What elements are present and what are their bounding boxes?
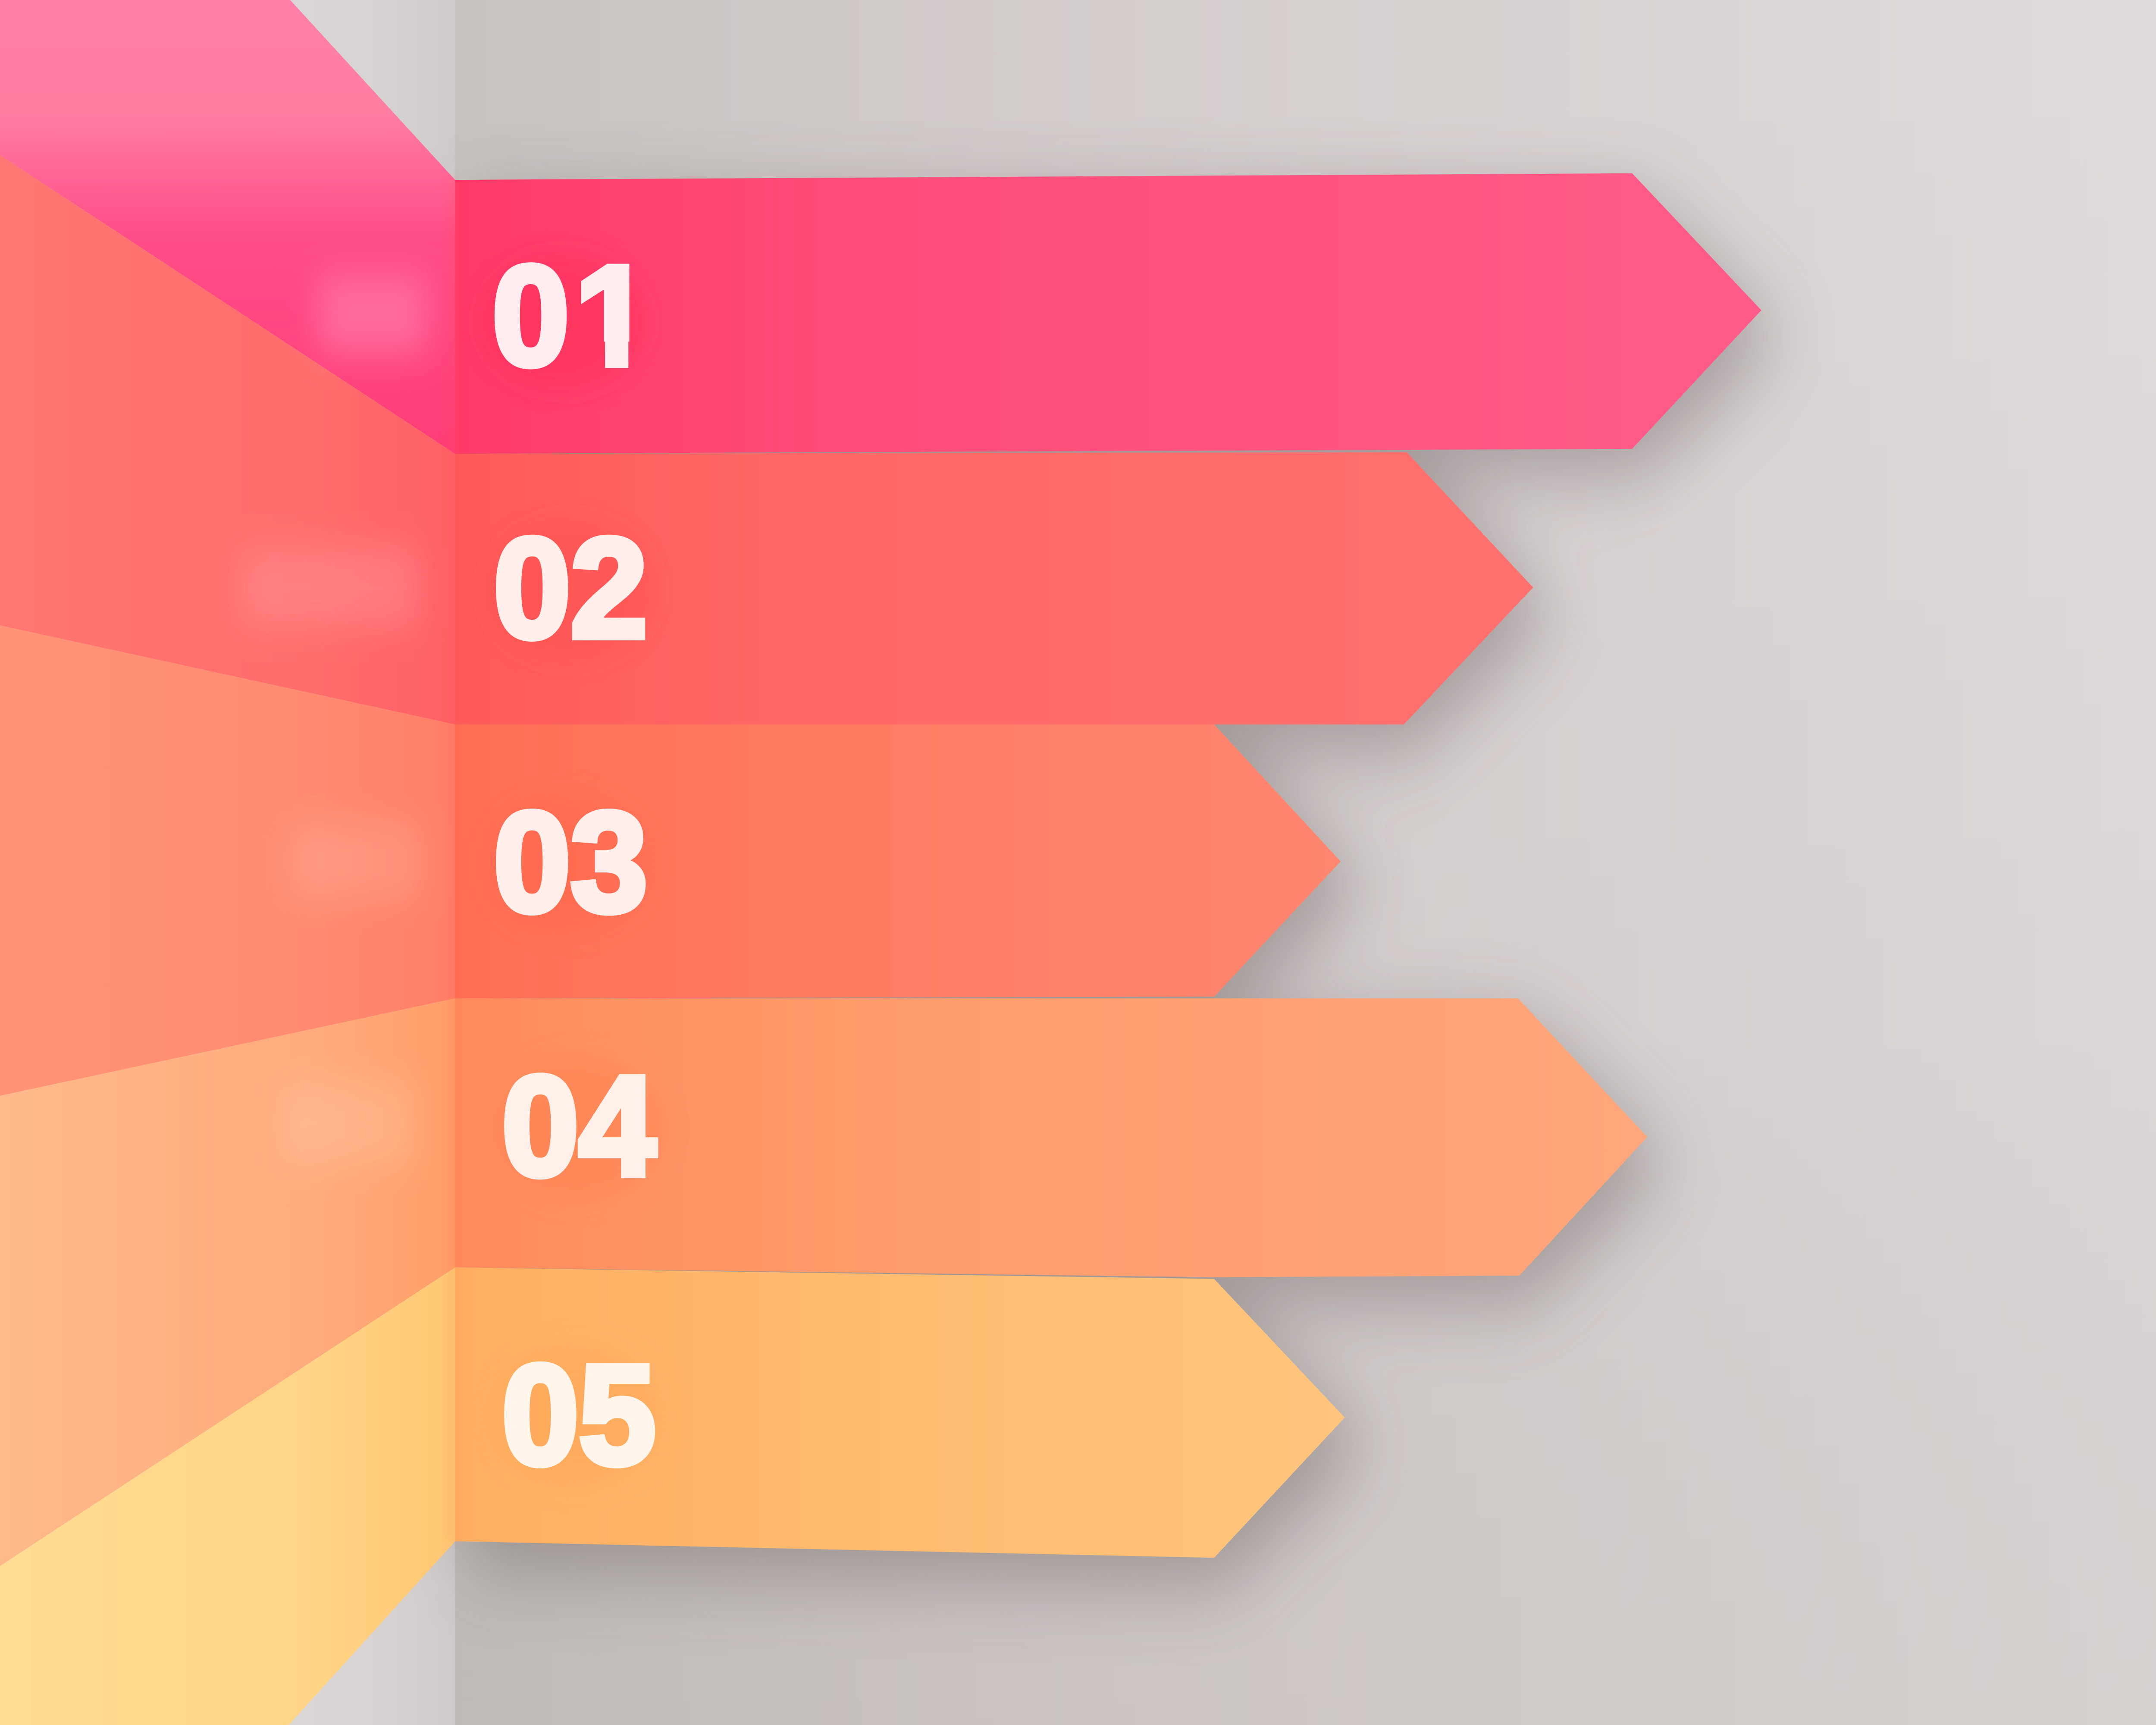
left fold of arrow 03	[0, 625, 455, 1096]
left fold of arrow 01	[0, 0, 455, 454]
number 05: 05	[502, 1335, 656, 1494]
right face of arrow 04	[455, 998, 1647, 1277]
right face of arrow 03	[455, 724, 1341, 998]
right face of arrow 05	[455, 1267, 1345, 1558]
left fold of arrow 02	[0, 155, 455, 724]
number 01: 01	[492, 236, 652, 395]
fold crease shading	[447, 178, 458, 1541]
number 02: 02	[494, 508, 648, 667]
blurred number reflections	[241, 277, 426, 1164]
right face of arrow 01	[455, 173, 1761, 454]
arrow 05	[0, 1267, 1345, 1725]
right face of arrow 02	[455, 452, 1533, 724]
arrow 01	[0, 0, 1761, 454]
arrow 03	[0, 625, 1341, 1096]
arrow 02	[0, 155, 1533, 724]
left fold of arrow 04	[0, 998, 455, 1566]
number glows	[479, 252, 665, 1485]
arrow cast shadows	[467, 200, 1783, 1584]
number 04: 04	[502, 1047, 657, 1205]
left fold of arrow 05	[0, 1267, 455, 1725]
arrow 04	[0, 998, 1647, 1566]
number 03: 03	[494, 783, 648, 941]
